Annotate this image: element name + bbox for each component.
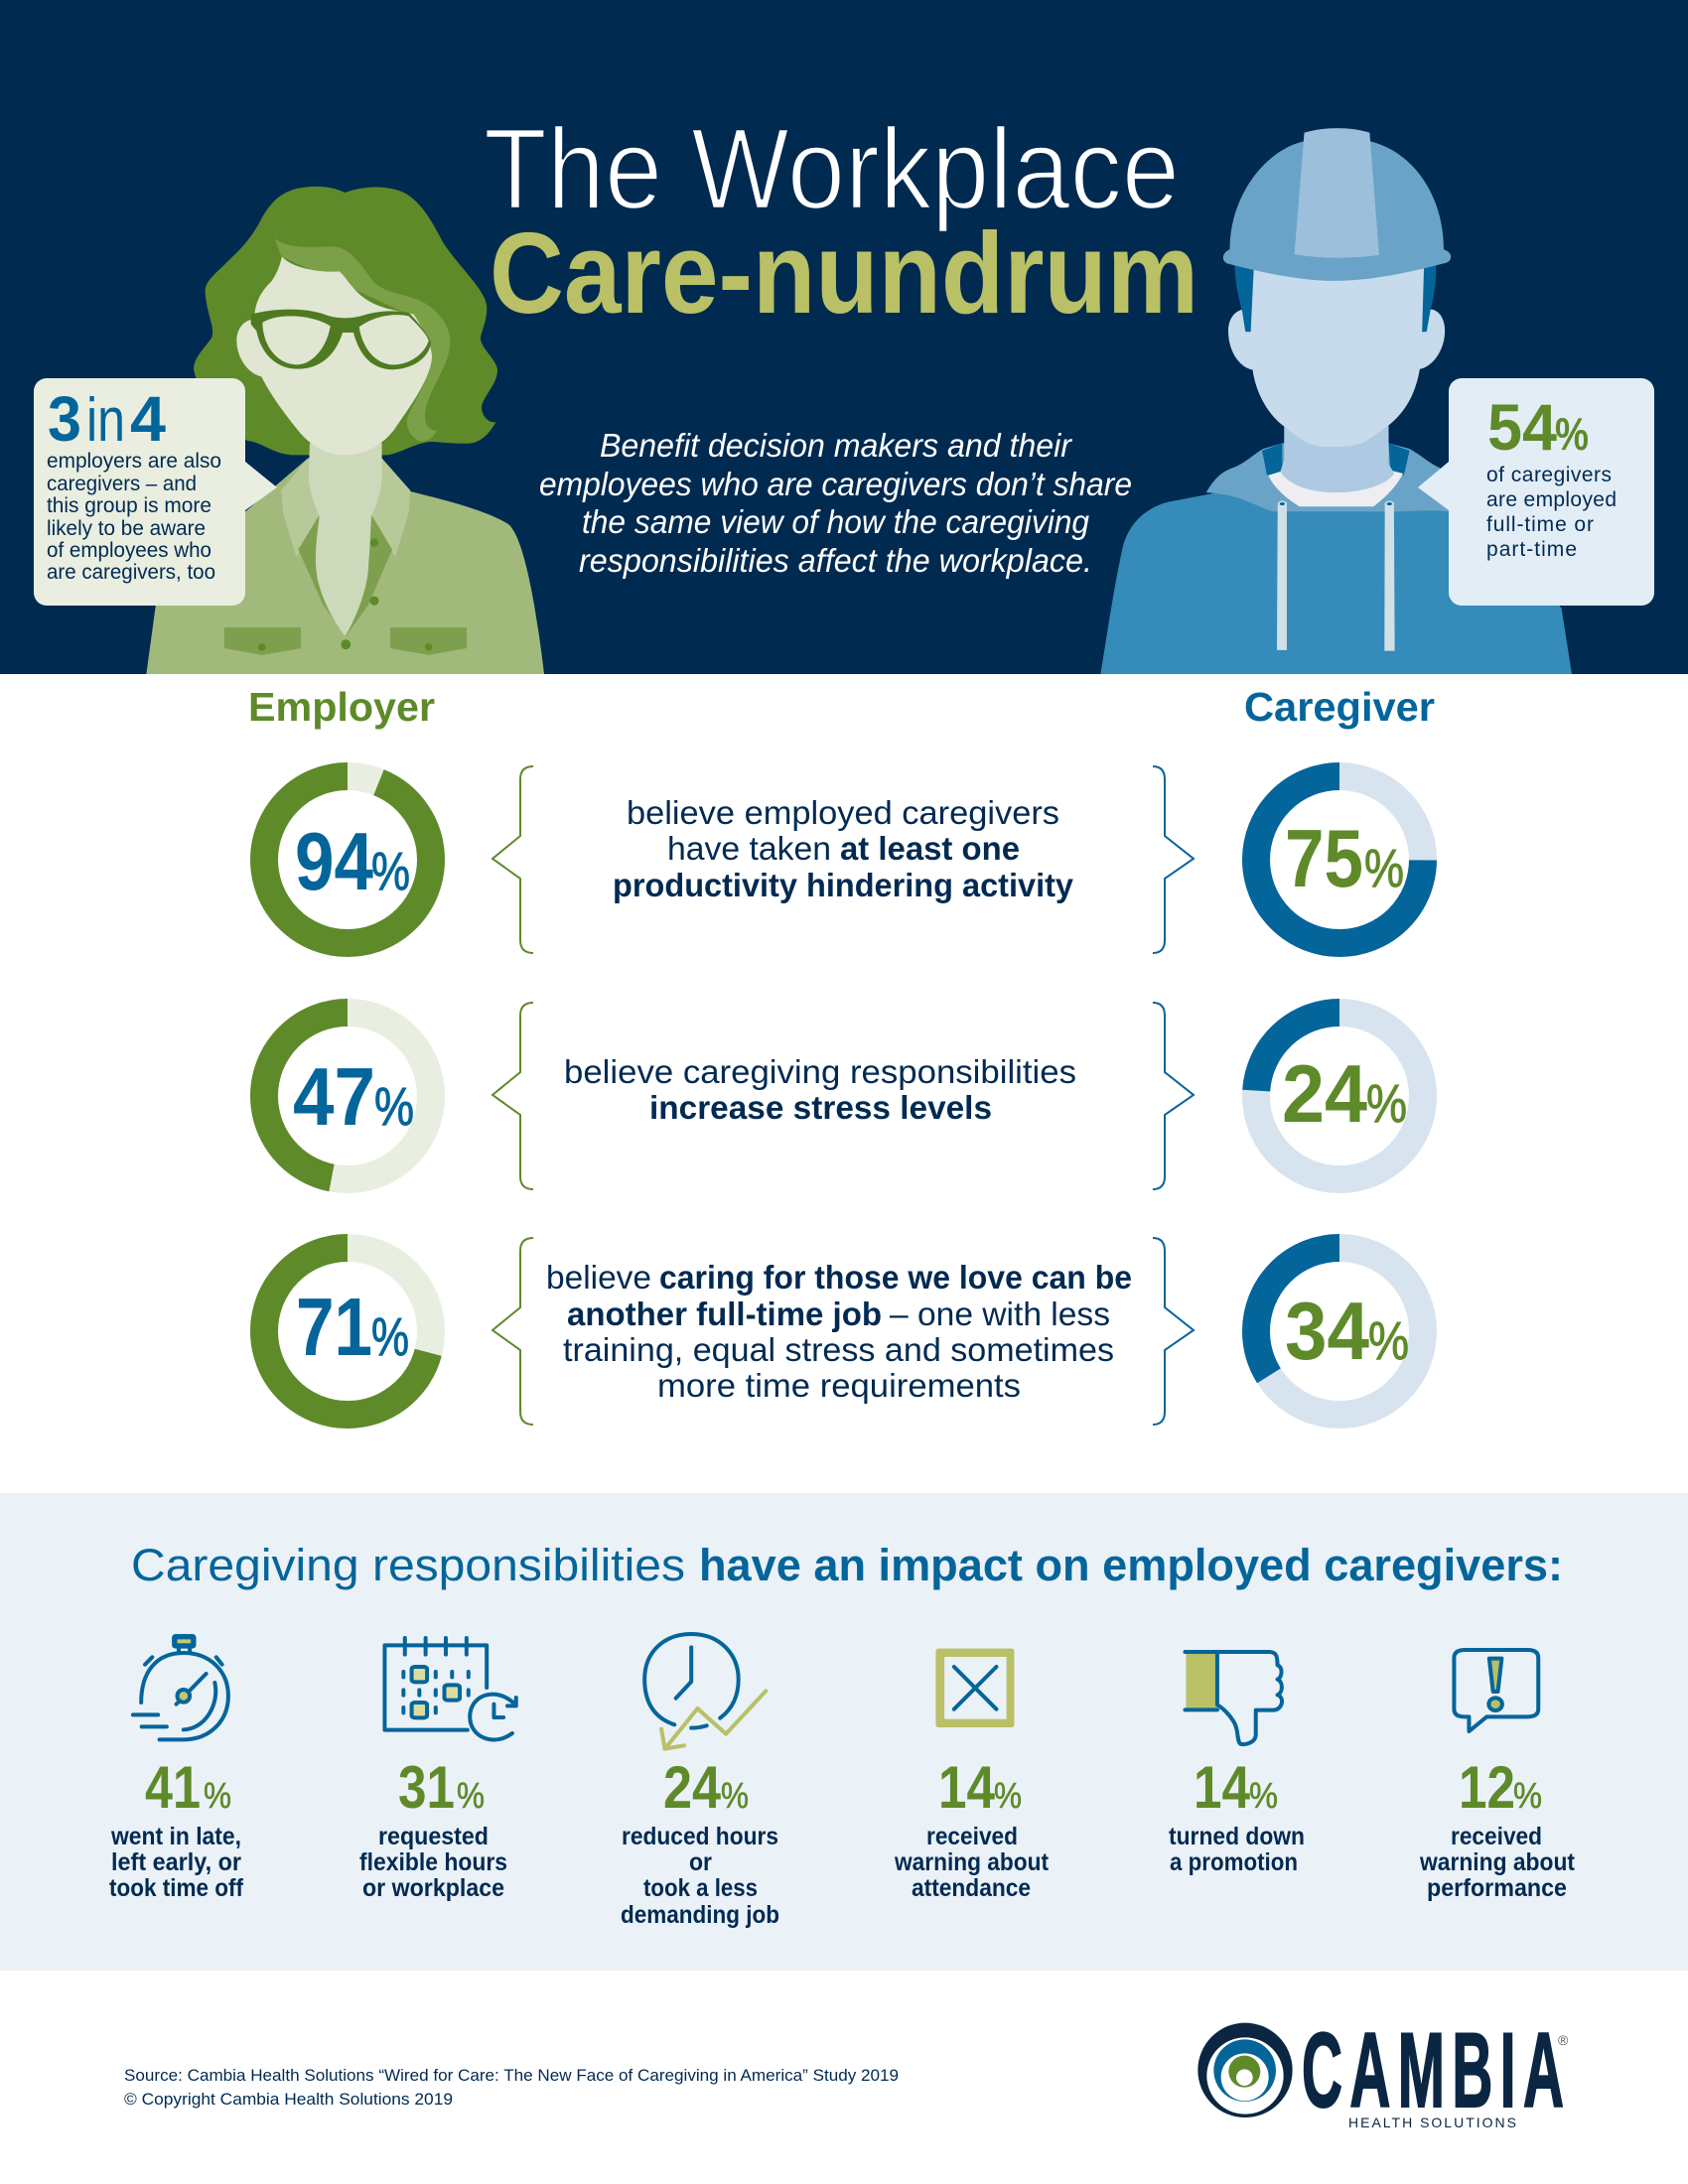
bracket: left xyxy=(492,1238,533,1425)
stat: 14 percent turned down a promotion: % xyxy=(1249,1775,1278,1816)
callout: 3 in 4 employers: in xyxy=(86,386,125,455)
donut: employer 47% xyxy=(264,1013,431,1179)
heading: impact: Caregiving responsibilities xyxy=(131,1540,685,1590)
intro text: the same view of how the caregiving xyxy=(582,503,1090,540)
bracket: right xyxy=(1153,766,1194,953)
row 1: productivity xyxy=(264,766,1423,953)
title: The Workplace xyxy=(484,104,1180,233)
text: full-time job statement: another full-time job xyxy=(567,1296,882,1332)
donut: employer 71%: 71 xyxy=(296,1281,372,1373)
text: productivity statement: have taken xyxy=(667,830,831,867)
intro text: Benefit decision makers and their xyxy=(600,427,1073,464)
stat: 14 percent turned down a promotion xyxy=(1169,1652,1305,1876)
stat: 31 percent requested flexible hours: flexible hours xyxy=(359,1848,507,1876)
heading: Caregiver: Caregiver xyxy=(1244,684,1435,730)
text: stress statement xyxy=(564,1053,1076,1126)
stat: 41 percent went in late xyxy=(109,1636,244,1902)
stat: 31 percent requested flexible hours: requested xyxy=(378,1823,489,1850)
stat: 31 percent requested flexible hours: 31 xyxy=(398,1754,455,1821)
text: stress statement: believe caregiving responsibilities xyxy=(564,1053,1076,1090)
callout: 54 percent of caregivers: 54 xyxy=(1487,390,1557,464)
bracket: left xyxy=(492,766,533,953)
stat: 41 percent went in late: took time off xyxy=(109,1874,244,1902)
icon: stopwatch xyxy=(133,1636,228,1739)
stat: 24 percent reduced hours xyxy=(621,1634,779,1929)
intro text: responsibilities affect the workplace. xyxy=(579,542,1092,579)
callout: 3 in 4 employers: likely to be aware xyxy=(47,517,206,540)
stat: 14 percent warning about attendance: % xyxy=(994,1775,1022,1816)
stat: 12 percent warning about performance: performance xyxy=(1427,1874,1567,1902)
text: productivity statement: believe employed caregivers xyxy=(627,794,1059,831)
stat: 14 percent turned down a promotion: a promotion xyxy=(1170,1848,1298,1876)
stat: 12 percent warning about performance: 12 xyxy=(1459,1754,1515,1821)
donut: caregiver 34%: 34 xyxy=(1285,1285,1369,1377)
donut: caregiver 75%: 75 xyxy=(1285,812,1363,904)
stat: 12 percent warning about performance: % xyxy=(1513,1775,1542,1816)
text: full-time job statement: caring for those we love can be xyxy=(659,1259,1132,1296)
stat: 24 percent reduced hours: reduced hours xyxy=(622,1823,778,1850)
callout: 54 percent of caregivers: are employed xyxy=(1486,488,1617,511)
icon: clock with falling arrow xyxy=(644,1634,766,1749)
icon: thumbs down xyxy=(1185,1652,1282,1744)
heading: impact xyxy=(131,1540,1563,1590)
donut: caregiver 75%: % xyxy=(1364,839,1404,898)
text: productivity statement: at least one xyxy=(840,830,1020,867)
text: full-time job statement xyxy=(546,1259,1132,1404)
donut: caregiver 24%: 24 xyxy=(1282,1047,1367,1140)
logo: Cambia Health Solutions: HEALTH SOLUTIONS xyxy=(1348,2115,1516,2130)
bracket: right xyxy=(1153,1238,1194,1425)
stat: 14 percent turned down a promotion: turned down xyxy=(1169,1823,1305,1850)
text: full-time job statement: more time requirements xyxy=(657,1367,1021,1404)
donut: employer 71%: % xyxy=(371,1307,409,1367)
intro text: employees who are caregivers don’t share xyxy=(539,466,1132,502)
text: productivity statement: productivity hindering activity xyxy=(613,867,1074,903)
title: Care-nundrum xyxy=(490,208,1198,338)
stat: 24 percent reduced hours: 24 xyxy=(663,1754,722,1821)
icon: exclamation speech bubble xyxy=(1454,1650,1538,1731)
donut: caregiver 24% xyxy=(1256,1013,1423,1179)
stat: 14 percent turned down a promotion: 14 xyxy=(1194,1754,1251,1821)
stat: 41 percent went in late: went in late, xyxy=(110,1823,241,1850)
stat: 14 percent warning about attendance: received xyxy=(926,1823,1018,1850)
illustration: employer woman xyxy=(146,187,544,674)
donut: employer 71% xyxy=(264,1248,431,1415)
icon: x box xyxy=(935,1649,1014,1727)
callout: 3 in 4 employers: 4 xyxy=(130,383,166,455)
panel: header xyxy=(0,0,1688,674)
logo: Cambia Health Solutions: ® xyxy=(1558,2032,1569,2048)
callout: 3 in 4 employers: of employees who xyxy=(47,539,211,562)
intro text xyxy=(539,427,1132,579)
panel: impact on employed caregivers xyxy=(0,1493,1688,1971)
stat: 24 percent reduced hours: demanding job xyxy=(621,1901,779,1929)
donut: caregiver 34% xyxy=(1256,1248,1423,1415)
icon: calendar with clock xyxy=(384,1638,516,1739)
row 2: stress xyxy=(264,1003,1423,1189)
donut: employer 47%: 47 xyxy=(293,1050,375,1143)
callout: 3 in 4 employers xyxy=(34,378,277,606)
callout: 3 in 4 employers: 3 xyxy=(48,383,81,455)
stat: 41 percent went in late: % xyxy=(204,1775,231,1816)
stat: 31 percent requested flexible hours: % xyxy=(457,1775,485,1816)
stat: 14 percent warning about attendance: 14 xyxy=(938,1754,996,1821)
heading: Employer: Employer xyxy=(248,684,435,730)
callout: 3 in 4 employers: are caregivers, too xyxy=(47,561,215,584)
source note: Source: Cambia Health Solutions “Wired for Care: The New Face of Caregiving in America” Study 2019 xyxy=(124,2066,899,2085)
donut: caregiver 24%: % xyxy=(1366,1074,1407,1134)
stat: 12 percent warning about performance: received xyxy=(1451,1823,1542,1850)
source note: © Copyright Cambia Health Solutions 2019 xyxy=(124,2090,453,2109)
text: full-time job statement: believe xyxy=(546,1259,651,1296)
stat: 41 percent went in late: 41 xyxy=(145,1754,201,1821)
title xyxy=(484,104,1198,338)
donut: employer 94%: % xyxy=(371,842,410,901)
callout: 3 in 4 employers: employers are also xyxy=(47,450,221,473)
donut: employer 94% xyxy=(264,776,431,943)
stat: 31 percent requested flexible hours xyxy=(359,1638,516,1902)
logo: Cambia Health Solutions: CAMBIA xyxy=(1302,2011,1571,2130)
donut: caregiver 34%: % xyxy=(1368,1311,1409,1371)
callout: 54 percent of caregivers: full-time or xyxy=(1486,513,1594,536)
donut: employer 94%: 94 xyxy=(295,815,373,907)
stat: 24 percent reduced hours: % xyxy=(721,1775,749,1816)
callout: 54 percent of caregivers: % xyxy=(1555,408,1589,460)
callout: 54 percent of caregivers xyxy=(1418,378,1654,606)
bracket: right xyxy=(1153,1003,1194,1189)
stat: 12 percent warning about performance: warning about xyxy=(1419,1848,1576,1876)
callout: 54 percent of caregivers: of caregivers xyxy=(1486,464,1612,486)
callout: 3 in 4 employers: caregivers – and xyxy=(47,473,197,495)
callout: 54 percent of caregivers: part-time xyxy=(1486,538,1577,561)
stat: 14 percent warning about attendance: attendance xyxy=(912,1874,1031,1902)
stat: 31 percent requested flexible hours: or workplace xyxy=(362,1874,504,1902)
stat: 41 percent went in late: left early, or xyxy=(111,1848,241,1876)
donut: employer 47%: % xyxy=(374,1077,414,1137)
illustration: caregiver man xyxy=(1100,128,1572,674)
donut: caregiver 75% xyxy=(1256,776,1423,943)
callout: 3 in 4 employers: this group is more xyxy=(47,494,211,517)
stat: 24 percent reduced hours: took a less xyxy=(643,1874,758,1902)
text: productivity statement xyxy=(613,794,1074,903)
text: stress statement: increase stress levels xyxy=(649,1089,992,1126)
stat: 24 percent reduced hours: or xyxy=(689,1848,712,1876)
stat: 14 percent warning about attendance xyxy=(894,1649,1050,1902)
stat: 12 percent warning about performance xyxy=(1419,1650,1576,1902)
source note xyxy=(124,2066,899,2109)
heading: impact: have an impact on employed caregivers: xyxy=(699,1540,1563,1590)
text: full-time job statement: – one with less xyxy=(890,1296,1110,1332)
row 3: full-time job xyxy=(264,1238,1423,1425)
bracket: left xyxy=(492,1003,533,1189)
stat: 14 percent warning about attendance: warning about xyxy=(894,1848,1050,1876)
text: full-time job statement: training, equal stress and sometimes xyxy=(563,1331,1114,1368)
